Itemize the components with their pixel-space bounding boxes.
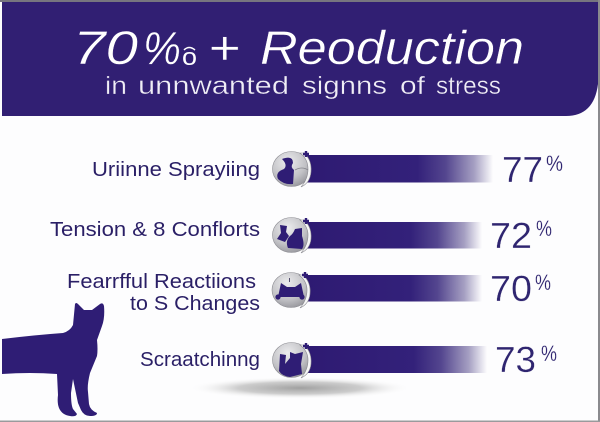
- value: 73: [495, 339, 536, 380]
- row: tension and conflicts: %: [536, 216, 552, 241]
- icon: two cats medal: [272, 218, 311, 253]
- title: o: [182, 44, 197, 71]
- row: fearful reactions: to S Changes: [130, 293, 260, 315]
- bar: [304, 275, 482, 302]
- label: Uriinne Sprayiing: [92, 159, 260, 181]
- label: Fearrfful Reactiions: [67, 271, 256, 293]
- subtitle: unnwanted: [138, 72, 289, 100]
- subtitle: [105, 72, 501, 100]
- row: tension and conflicts: [50, 215, 552, 256]
- title: Reoduction: [260, 21, 524, 74]
- value: 77: [502, 149, 543, 190]
- row: urine spraying: [92, 149, 563, 190]
- icon: spraying cat medal: [272, 151, 311, 187]
- shadow under bars: [188, 377, 412, 399]
- row: urine spraying: %: [546, 151, 563, 176]
- title: [73, 21, 524, 74]
- subtitle: signns: [302, 72, 387, 100]
- subtitle: stress: [436, 72, 501, 100]
- bar: [304, 222, 482, 248]
- header banner: [2, 2, 598, 116]
- title: 70: [73, 21, 138, 74]
- bar: [304, 346, 487, 373]
- bar: [304, 155, 493, 182]
- label: Scraatchinng: [140, 349, 260, 371]
- row: fearful reactions: [67, 268, 551, 315]
- cat silhouette: [2, 303, 104, 416]
- value: 72: [490, 215, 532, 256]
- icon: scratching cat medal: [272, 342, 311, 378]
- label: Tension & 8 Conflorts: [50, 219, 260, 241]
- subtitle: in: [105, 72, 127, 100]
- value: 70: [490, 268, 532, 309]
- title: +: [208, 21, 240, 74]
- title: %: [143, 22, 181, 74]
- subtitle: of: [400, 72, 425, 100]
- row: fearful reactions: %: [535, 270, 551, 295]
- icon: fearful cat medal: [272, 272, 310, 308]
- row: scratching: [140, 339, 557, 380]
- row: scratching: %: [541, 341, 557, 366]
